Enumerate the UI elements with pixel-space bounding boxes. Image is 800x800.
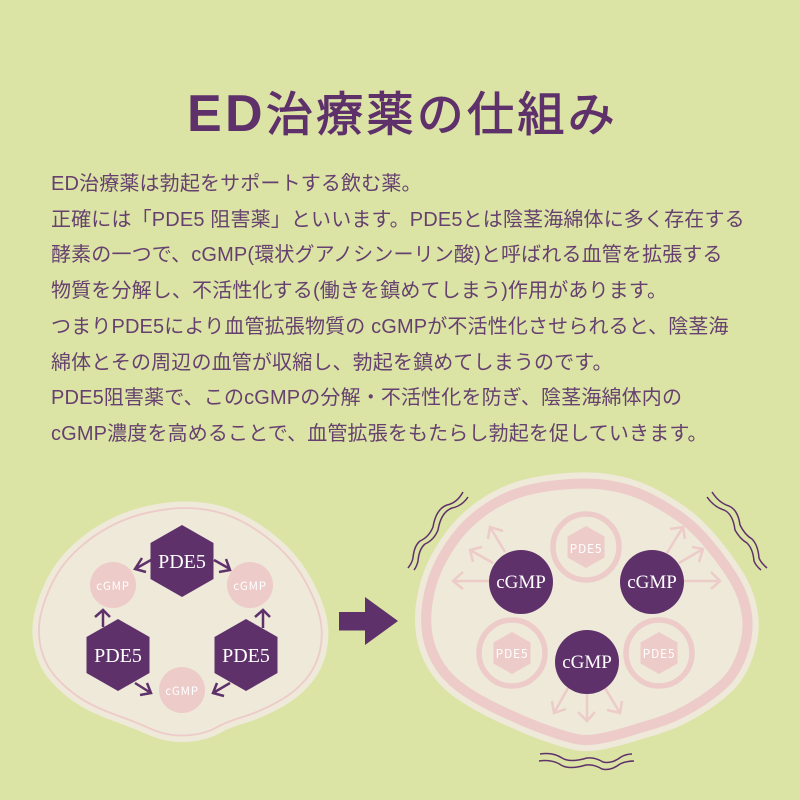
PDE5 hexagon left: PDE5: [94, 645, 142, 667]
PDE5 hexagon left: [86, 619, 150, 691]
body text block: cGMP濃度を高めることで、血管拡張をもたらし勃起を促していきます。: [51, 423, 708, 445]
body text block: 綿体とその周辺の血管が収縮し、勃起を鎮めてしまうのです。: [51, 352, 613, 374]
inhibited PDE5 ring right: PDE5: [643, 645, 675, 662]
cGMP circle bottom: cGMP: [165, 683, 199, 699]
cGMP circle top left: [90, 562, 136, 608]
PDE5 hexagon top: PDE5: [158, 551, 206, 573]
inhibited PDE5 ring left: [479, 620, 545, 686]
inhibited PDE5 ring top: [553, 514, 619, 580]
body text block: [51, 173, 745, 445]
panel: dilated vessel with PDE5 inhibited: [426, 484, 748, 740]
vibration lines bottom: [539, 754, 634, 769]
vessel inner line: [39, 508, 322, 736]
body text block: 正確には「PDE5 阻害薬」といいます。PDE5とは陰茎海綿体に多く存在する: [51, 209, 745, 231]
vibration lines top left: [408, 492, 468, 570]
arrows from PDE5 to cGMP: [95, 558, 270, 696]
body text block: 酵素の一つで、cGMP(環状グアノシンーリン酸)と呼ばれる血管を拡張する: [51, 244, 723, 266]
arrow between panels: [339, 597, 398, 645]
cGMP circle top right: cGMP: [233, 578, 267, 594]
body text block: ED治療薬は勃起をサポートする飲む薬。: [51, 173, 422, 195]
vibration lines top right: [707, 492, 767, 570]
cGMP circle bottom: cGMP: [562, 652, 612, 673]
PDE5 hexagon right: [214, 619, 278, 691]
cGMP circle top left: cGMP: [96, 578, 130, 594]
cGMP circle right: [620, 550, 684, 614]
body text block: つまりPDE5により血管拡張物質の cGMPが不活性化させられると、陰茎海: [51, 316, 729, 338]
inhibited PDE5 ring left: PDE5: [496, 645, 528, 662]
vessel wall outer: [426, 484, 748, 740]
panel: contracted vessel with PDE5 active: [39, 508, 322, 736]
vessel wall: [39, 508, 322, 736]
cGMP circle bottom: [159, 667, 205, 713]
cGMP circle left: cGMP: [496, 572, 546, 593]
cGMP circle left: [489, 550, 553, 614]
PDE5 hexagon right: PDE5: [222, 645, 270, 667]
cGMP circle right: cGMP: [627, 572, 677, 593]
title: ED治療薬の仕組み: [187, 85, 618, 143]
body text block: PDE5阻害薬で、このcGMPの分解・不活性化を防ぎ、陰茎海綿体内の: [51, 387, 682, 409]
PDE5 hexagon top: [150, 525, 214, 597]
cGMP circle top right: [227, 562, 273, 608]
cGMP circle bottom: [555, 630, 619, 694]
body text block: 物質を分解し、不活性化する(働きを鎮めてしまう)作用があります。: [51, 280, 667, 302]
inhibited PDE5 ring top: PDE5: [570, 540, 602, 557]
inhibited PDE5 ring right: [626, 620, 692, 686]
dilation arrows: [453, 527, 720, 721]
vessel wall pink: [426, 484, 748, 740]
